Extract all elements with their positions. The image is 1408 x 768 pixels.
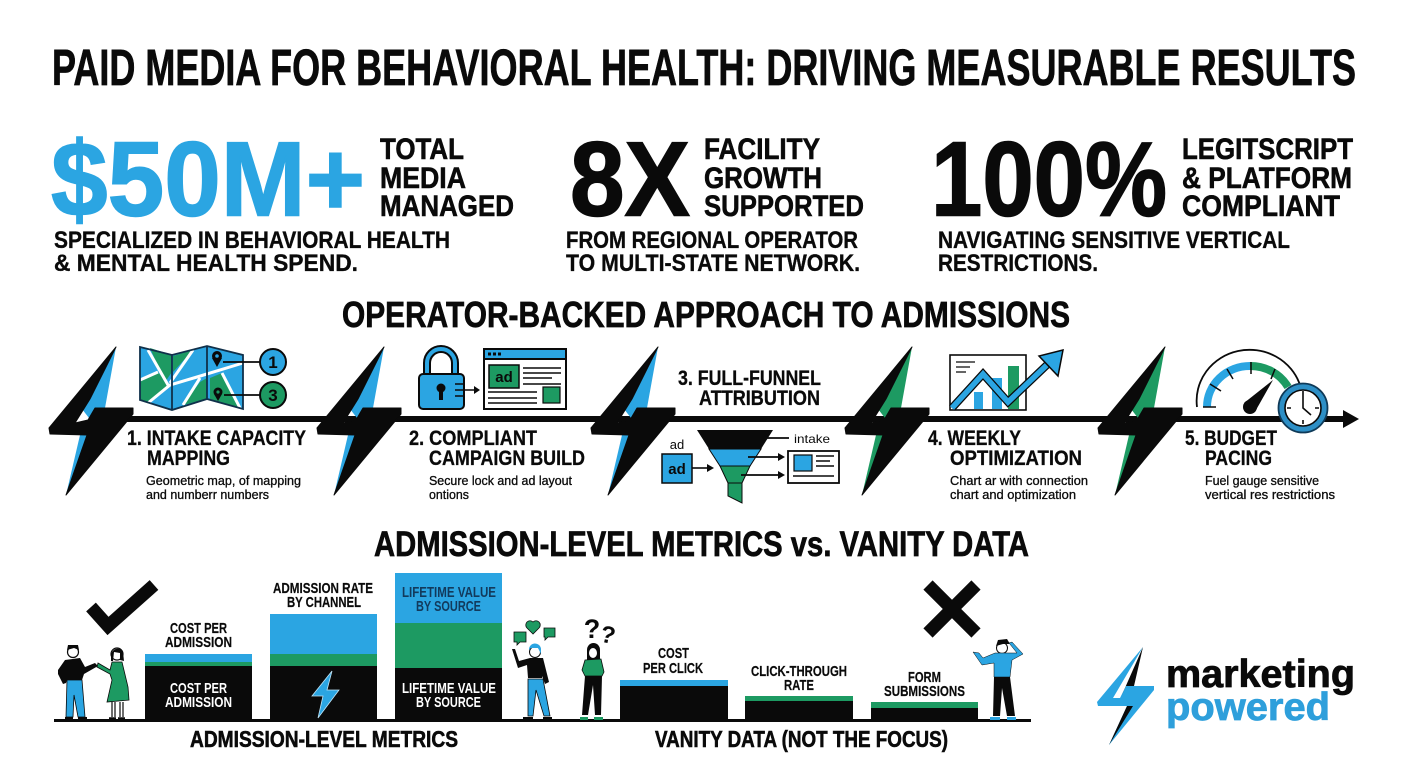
- stat: 100% LegitScript and platform compliant: [931, 120, 1353, 277]
- bar: lifetime value by source: LIFETIME VALUE: [402, 680, 496, 697]
- icon: lightning bolt 2: [317, 347, 401, 495]
- stat: $50M+ total media managed: SPECIALIZED IN BEHAVIORAL HEALTH: [54, 227, 450, 254]
- step 2 label: 2. COMPLIANT: [409, 427, 537, 450]
- step 3 label: [678, 367, 821, 410]
- bar: form submissions: [871, 669, 978, 720]
- step 2 label: ontions: [429, 487, 469, 502]
- step 4 label: Chart ar with connection: [950, 473, 1088, 488]
- stat: 100% LegitScript and platform compliant: LEGITSCRIPT: [1182, 133, 1353, 166]
- bar: admission rate by channel: BY CHANNEL: [287, 594, 361, 611]
- step 1 label: [127, 427, 306, 502]
- logo: marketing powered: [1097, 647, 1355, 745]
- bar: click-through rate: [745, 663, 853, 720]
- bar: cost per admission: [145, 620, 252, 720]
- heading: approach: OPERATOR-BACKED APPROACH TO ADMISSIONS: [342, 294, 1070, 335]
- icon: check mark: [91, 585, 154, 626]
- icon: attribution funnel: intake: [794, 432, 830, 446]
- step 5 label: 5. BUDGET: [1185, 427, 1277, 450]
- step 5 label: PACING: [1205, 447, 1272, 470]
- people: handshake pair: [58, 645, 129, 718]
- icon: folded map with numbered pins: [140, 346, 286, 410]
- stat: 100% LegitScript and platform compliant: COMPLIANT: [1182, 190, 1340, 223]
- bar: cost per click: COST: [658, 645, 689, 662]
- icon: attribution funnel: [662, 430, 839, 503]
- stat: 100% LegitScript and platform compliant: & PLATFORM: [1182, 162, 1352, 195]
- stat: 100% LegitScript and platform compliant: 100%: [931, 120, 1167, 238]
- icon: attribution funnel: ad: [670, 437, 684, 452]
- stat: $50M+ total media managed: [51, 120, 514, 277]
- step 4 label: chart and optimization: [950, 487, 1076, 502]
- icon: cross mark: [928, 585, 976, 633]
- icon: lightning bolt 5: [1098, 347, 1182, 495]
- stat: 8X facility growth supported: 8X: [570, 120, 690, 238]
- step 2 label: CAMPAIGN BUILD: [429, 447, 585, 470]
- bar: lifetime value by source: [395, 573, 502, 720]
- step 5 label: vertical res restrictions: [1205, 487, 1335, 502]
- heading: metrics comparison: ADMISSION-LEVEL METRICS vs. VANITY DATA: [374, 525, 1029, 564]
- chart baseline: [54, 719, 1031, 722]
- step 3 label: 3. FULL-FUNNEL: [678, 367, 821, 390]
- bar: cost per admission: COST PER: [170, 680, 227, 697]
- people: confused person: [973, 639, 1023, 718]
- bar: cost per admission: COST PER: [170, 620, 227, 637]
- icon: growth chart with arrow: [950, 350, 1063, 410]
- step 5 label: [1185, 427, 1335, 502]
- people: person with question marks: ?: [598, 621, 618, 650]
- stat: $50M+ total media managed: MEDIA: [380, 162, 466, 195]
- icon: fuel gauge and clock: [1197, 350, 1328, 432]
- logo: marketing powered: powered: [1166, 686, 1330, 729]
- bar: admission rate by channel: ADMISSION RATE: [273, 580, 373, 597]
- bar: click-through rate: CLICK-THROUGH: [751, 663, 847, 680]
- stat: $50M+ total media managed: & MENTAL HEALTH SPEND.: [54, 250, 358, 277]
- step 4 label: 4. WEEKLY: [928, 427, 1021, 450]
- stat: 8X facility growth supported: SUPPORTED: [704, 190, 864, 223]
- stat: 100% LegitScript and platform compliant: RESTRICTIONS.: [938, 250, 1098, 277]
- stat: 8X facility growth supported: FROM REGIONAL OPERATOR: [566, 227, 858, 254]
- bar: form submissions: FORM: [908, 669, 941, 686]
- step 4 label: [928, 427, 1088, 502]
- step 1 label: 1. INTAKE CAPACITY: [127, 427, 306, 450]
- step 1 label: Geometric map, of mapping: [146, 473, 301, 488]
- icon: padlock and ad layout: [419, 349, 566, 409]
- step 5 label: Fuel gauge sensitive: [1205, 473, 1319, 488]
- bar: cost per admission: ADMISSION: [165, 694, 232, 711]
- bar: form submissions: SUBMISSIONS: [884, 683, 965, 700]
- icon: lightning bolt 3: [591, 347, 675, 495]
- stat: 100% LegitScript and platform compliant: NAVIGATING SENSITIVE VERTICAL: [938, 227, 1290, 254]
- step 1 label: MAPPING: [147, 447, 230, 470]
- people: person with question marks: [580, 614, 618, 718]
- label: admission-level metrics: ADMISSION-LEVEL METRICS: [190, 726, 458, 752]
- timeline arrow: [120, 410, 1359, 428]
- stat: $50M+ total media managed: TOTAL: [380, 133, 464, 166]
- stat: $50M+ total media managed: $50M+: [51, 120, 365, 238]
- icon: folded map with numbered pins: 1: [268, 353, 278, 372]
- stat: 8X facility growth supported: [566, 120, 864, 277]
- bar: cost per click: PER CLICK: [643, 660, 703, 677]
- bar: click-through rate: RATE: [784, 677, 814, 694]
- people: person with speech bubbles: [512, 621, 555, 718]
- step 2 label: [409, 427, 585, 502]
- label: vanity data: VANITY DATA (NOT THE FOCUS): [655, 726, 948, 752]
- bar: lifetime value by source: LIFETIME VALUE: [402, 584, 496, 601]
- step 4 label: OPTIMIZATION: [950, 447, 1082, 470]
- icon: lightning bolt 4: [845, 347, 929, 495]
- bar: admission rate by channel: [270, 580, 377, 720]
- bar: lifetime value by source: BY SOURCE: [416, 598, 481, 615]
- icon: padlock and ad layout: ad: [495, 369, 513, 386]
- stat: 8X facility growth supported: TO MULTI-STATE NETWORK.: [566, 250, 860, 277]
- logo: marketing powered: marketing: [1166, 653, 1355, 696]
- people: person with question marks: ?: [584, 614, 600, 644]
- icon: lightning bolt 1: [49, 347, 133, 495]
- bar: cost per click: [620, 645, 728, 720]
- icon: attribution funnel: ad: [668, 461, 686, 478]
- bar: lifetime value by source: BY SOURCE: [416, 694, 481, 711]
- stat: 8X facility growth supported: FACILITY: [704, 133, 820, 166]
- icon: folded map with numbered pins: 3: [268, 386, 278, 405]
- stat: 8X facility growth supported: GROWTH: [704, 162, 822, 195]
- step 2 label: Secure lock and ad layout: [429, 473, 572, 488]
- step 3 label: ATTRIBUTION: [699, 387, 820, 410]
- step 1 label: and numberr numbers: [146, 487, 269, 502]
- stat: $50M+ total media managed: MANAGED: [380, 190, 514, 223]
- bar: cost per admission: ADMISSION: [165, 634, 232, 651]
